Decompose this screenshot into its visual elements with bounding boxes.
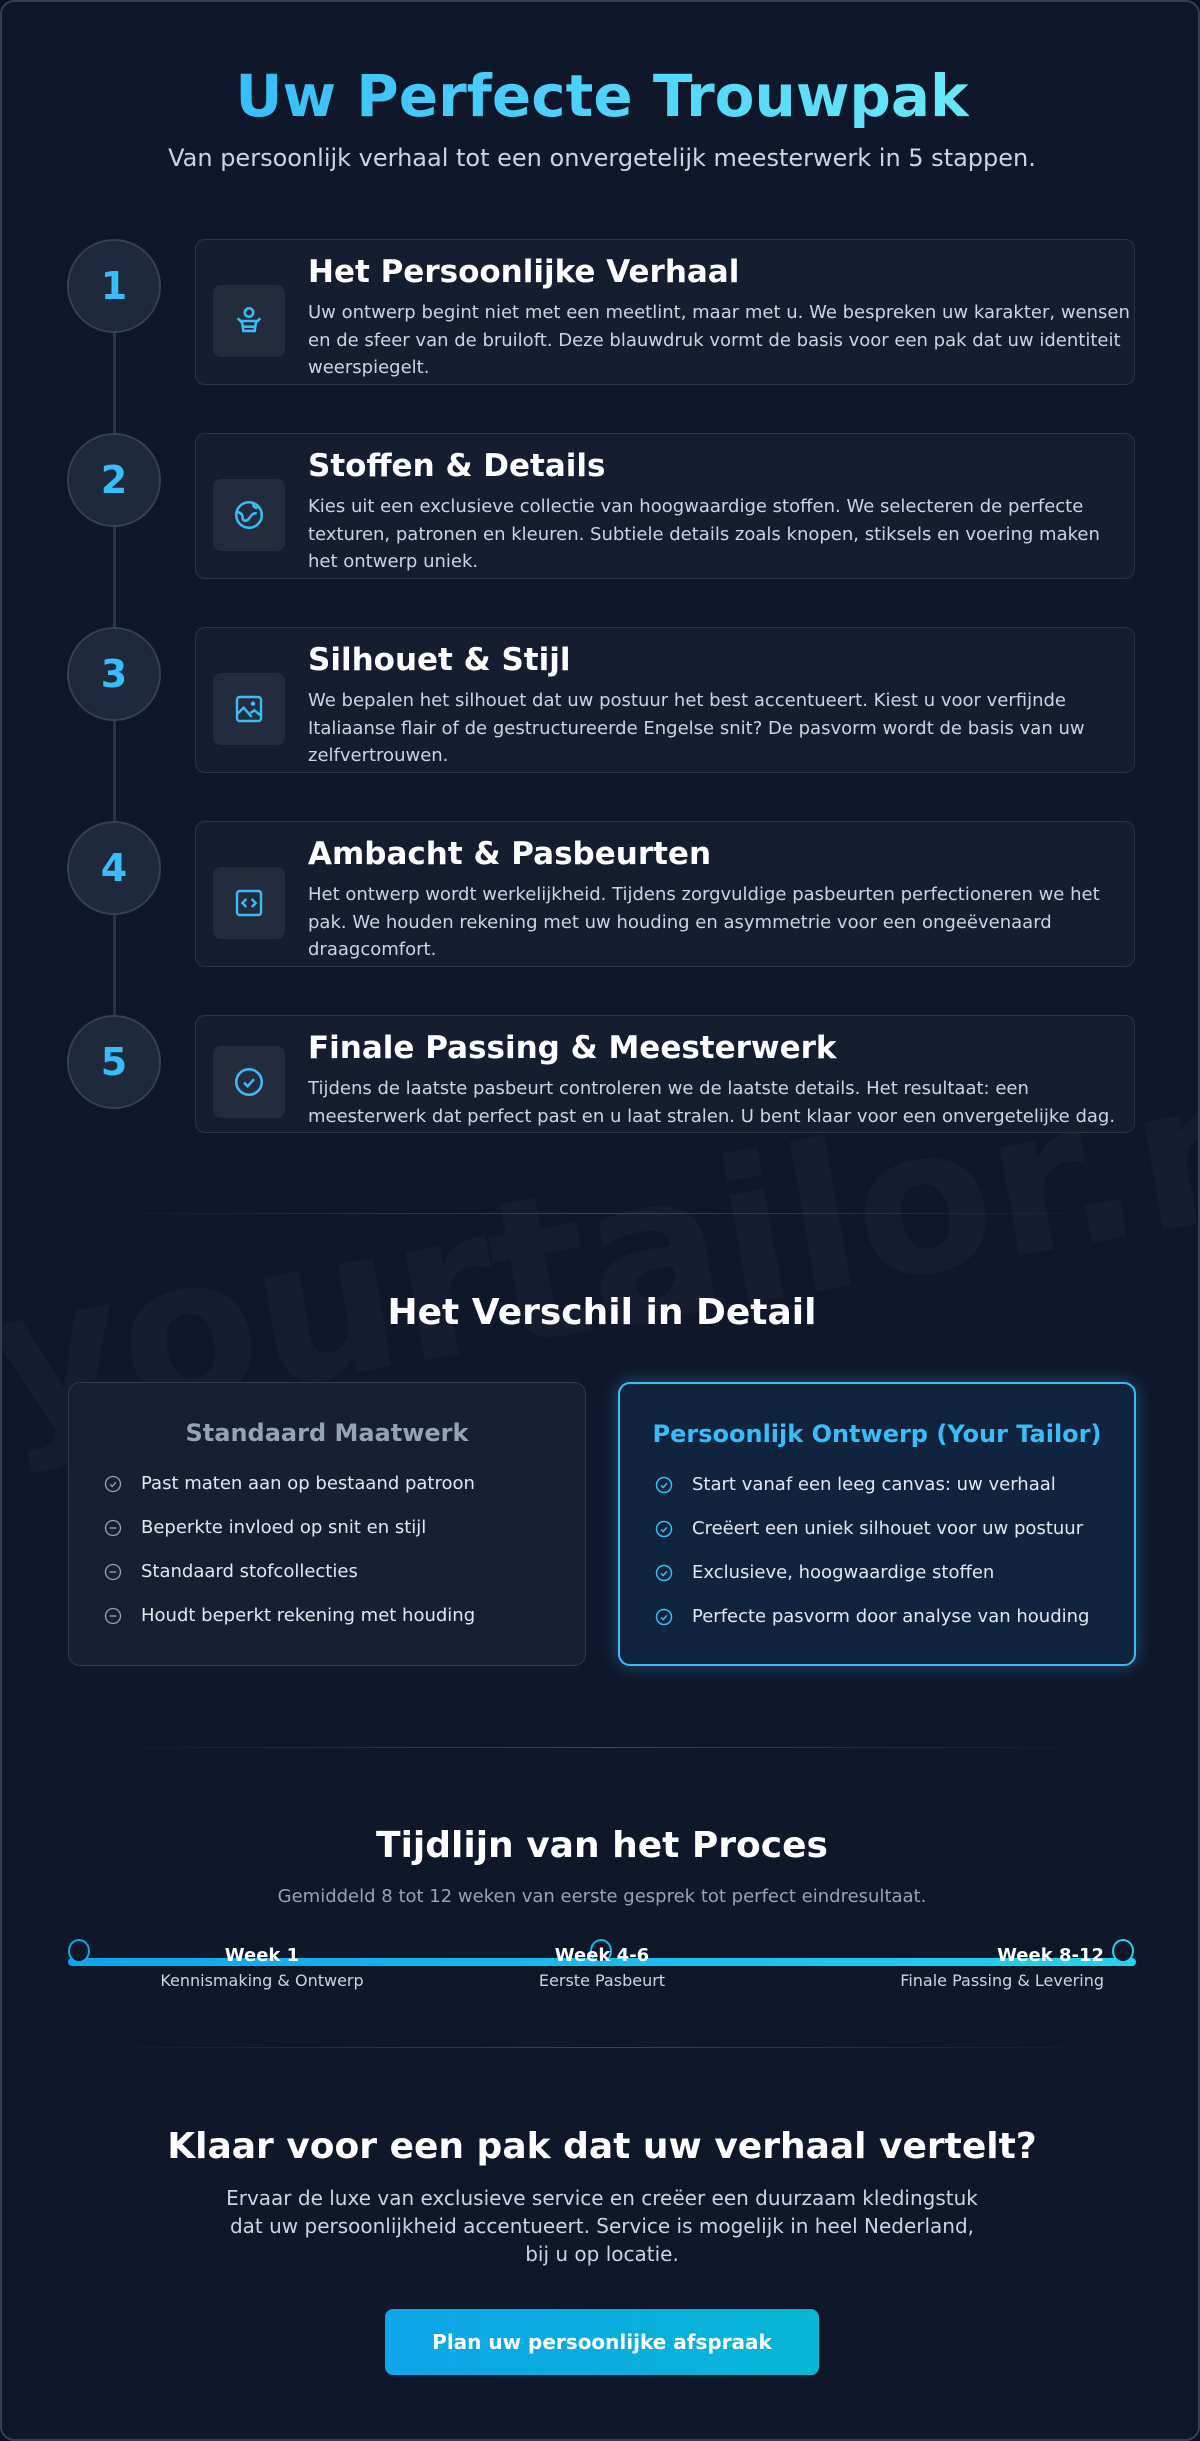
item: Start vanaf een leeg canvas: uw verhaal [692, 1474, 1056, 1495]
CTA text: dat uw persoonlijkheid accentueert. Service is mogelijk in heel Nederland, [230, 2214, 974, 2238]
card 3: zelfvertrouwen. [308, 745, 448, 766]
item: Beperkte invloed op snit en stijl [141, 1517, 426, 1538]
panel: standaard maatwerk: Standaard Maatwerk [186, 1419, 468, 1447]
label week 8-12: Finale Passing & Levering [900, 1971, 1104, 1990]
card 3: We bepalen het silhouet dat uw postuur het best accentueert. Kiest u voor verfijnde [308, 690, 1066, 711]
label week 4-6: Eerste Pasbeurt [539, 1971, 665, 1990]
CTA text [226, 2186, 978, 2266]
CTA button [385, 2309, 819, 2375]
card 2: Stoffen & Details [308, 448, 605, 484]
label week 8-12: Week 8-12 [997, 1945, 1104, 1966]
CTA text: Ervaar de luxe van exclusieve service en creëer een duurzaam kledingstuk [226, 2186, 978, 2210]
card 5: Tijdens de laatste pasbeurt controleren we de laatste details. Het resultaat: een [308, 1078, 1029, 1099]
label week 1 [160, 1945, 364, 1990]
CTA heading: Klaar voor een pak dat uw verhaal vertelt? [167, 2126, 1037, 2167]
icon: check circle [213, 1046, 285, 1118]
card 2: texturen, patronen en kleuren. Subtiele details zoals knopen, stiksels en voering maken [308, 524, 1100, 544]
label week 8-12 [900, 1945, 1104, 1990]
card 1: Uw ontwerp begint niet met een meetlint, maar met u. We bespreken uw karakter, wensen [308, 302, 1130, 323]
item: Past maten aan op bestaand patroon [141, 1473, 475, 1494]
label week 1: Week 1 [225, 1945, 299, 1966]
timeline bar [68, 1958, 1136, 1966]
card 1 [195, 239, 1135, 385]
heading: verschil: Het Verschil in Detail [388, 1292, 816, 1333]
card 4: pak. We houden rekening met uw houding en asymmetrie voor een ongeëvenaard [308, 912, 1052, 932]
marker 3 [1112, 1939, 1134, 1963]
step 2 [67, 433, 1135, 579]
item: Exclusieve, hoogwaardige stoffen [692, 1562, 994, 1583]
card 1: en de sfeer van de bruiloft. Deze blauwdruk vormt de basis voor een pak dat uw identiteit [308, 330, 1121, 350]
item: Perfecte pasvorm door analyse van houding [692, 1606, 1089, 1627]
step 1 [67, 239, 1135, 385]
subtitle: tijdlijn: Gemiddeld 8 tot 12 weken van eerste gesprek tot perfect eindresultaat. [278, 1886, 926, 1907]
step 3: 3 [101, 652, 127, 696]
label week 1: Kennismaking & Ontwerp [160, 1971, 364, 1990]
card 5: meesterwerk dat perfect past en u laat stralen. U bent klaar voor een onvergetelijke dag. [308, 1106, 1115, 1126]
subtitle: Van persoonlijk verhaal tot een onvergetelijk meesterwerk in 5 stappen. [168, 144, 1036, 172]
icon: image [213, 673, 285, 745]
card 2: het ontwerp uniek. [308, 551, 478, 572]
card 5 [195, 1015, 1135, 1133]
card 1: Het Persoonlijke Verhaal [308, 254, 739, 290]
heading: tijdlijn: Tijdlijn van het Proces [376, 1825, 828, 1866]
step 4 [67, 821, 1135, 967]
label week 4-6 [539, 1945, 665, 1990]
panel: standaard maatwerk [68, 1382, 586, 1666]
marker 1 [68, 1939, 90, 1963]
card 2 [195, 433, 1135, 579]
icon: code [213, 867, 285, 939]
label week 4-6: Week 4-6 [555, 1945, 649, 1966]
item: Houdt beperkt rekening met houding [141, 1605, 475, 1626]
card 5: Finale Passing & Meesterwerk [308, 1030, 836, 1066]
marker 2 [590, 1939, 612, 1963]
icon: person [213, 285, 285, 357]
card 2: Kies uit een exclusieve collectie van hoogwaardige stoffen. We selecteren de perfecte [308, 496, 1083, 517]
card 4: Ambacht & Pasbeurten [308, 836, 711, 872]
card 4 [195, 821, 1135, 967]
step 2: 2 [101, 458, 127, 502]
card 4: draagcomfort. [308, 939, 436, 960]
card 3: Italiaanse flair of de gestructureerde Engelse snit? De pasvorm wordt de basis van uw [308, 718, 1085, 738]
title: Uw Perfecte Trouwpak [235, 62, 969, 130]
timeline vertical line [113, 302, 116, 1082]
card 1: weerspiegelt. [308, 357, 429, 378]
panel: persoonlijk ontwerp: Persoonlijk Ontwerp (Your Tailor) [653, 1420, 1101, 1448]
card 4: Het ontwerp wordt werkelijkheid. Tijdens zorgvuldige pasbeurten perfectioneren we het [308, 884, 1100, 905]
step 5 [67, 1015, 1135, 1133]
item: Standaard stofcollecties [141, 1561, 358, 1582]
icon: palette [213, 479, 285, 551]
step 5: 5 [101, 1040, 127, 1084]
CTA text: bij u op locatie. [525, 2242, 679, 2266]
step 3 [67, 627, 1135, 773]
panel: persoonlijk ontwerp [618, 1382, 1136, 1666]
step 1: 1 [101, 264, 127, 308]
card 3 [195, 627, 1135, 773]
CTA button: Plan uw persoonlijke afspraak [432, 2330, 772, 2354]
step 4: 4 [101, 846, 127, 890]
card 3: Silhouet & Stijl [308, 642, 571, 678]
item: Creëert een uniek silhouet voor uw postuur [692, 1518, 1083, 1539]
